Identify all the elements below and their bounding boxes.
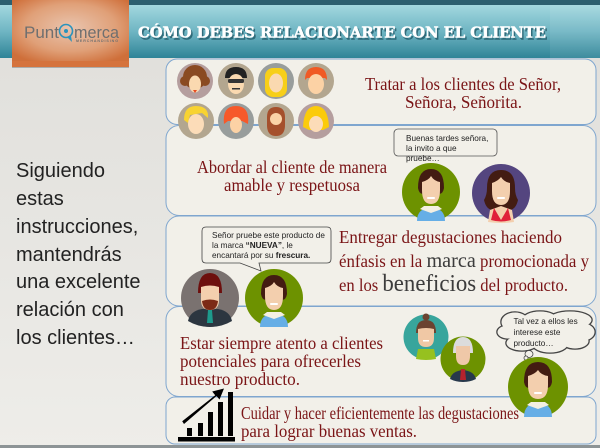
avatar grid: clients: [177, 63, 334, 139]
text: tratar: [365, 74, 561, 112]
text: estar atento: potenciales para ofrecerles: [180, 351, 361, 371]
logo: Punt: [24, 23, 59, 42]
text: entregar degustaciones: énfasis en la marca promocionada y: [339, 248, 589, 272]
text: estar atento: [180, 333, 383, 389]
left text block: los clientes…: [16, 327, 135, 349]
text: abordar: [197, 157, 387, 195]
thought bubble: producto…: [514, 339, 554, 348]
speech bubble: greeting: pruebe…: [406, 154, 440, 163]
left text block: mantendrás: [16, 244, 122, 266]
title: CÓMO DEBES RELACIONARTE CON EL CLIENTE: [138, 24, 546, 42]
avatar: old man: [440, 336, 486, 382]
text: tratar: Tratar a los clientes de Señor,: [365, 74, 561, 94]
panel 4: [166, 306, 596, 396]
header band: [0, 0, 600, 58]
speech bubble: greeting: [394, 129, 497, 163]
left text block: instrucciones,: [16, 216, 138, 238]
text: entregar degustaciones: en los beneficios del producto.: [339, 271, 568, 297]
logo: MERCHANDISING: [76, 39, 118, 43]
speech bubble: greeting: la invito a que: [406, 144, 457, 153]
left text block: una excelente: [16, 271, 141, 293]
logo: merca: [74, 23, 120, 42]
text: cuidar: para lograr buenas ventas.: [241, 421, 417, 441]
speech bubble: product offer: la marca “NUEVA”, le: [212, 241, 293, 250]
text: abordar: amable y respetuosa: [224, 175, 360, 195]
thought bubble: interese este: [514, 328, 561, 337]
avatar: woman green offering: [245, 269, 303, 327]
speech bubble: product offer: Señor pruebe este producto de: [212, 231, 325, 240]
text: abordar: Abordar al cliente de manera: [197, 157, 387, 177]
thought bubble: Tal vez a ellos les: [514, 317, 578, 326]
left text block: Siguiendo: [16, 160, 105, 182]
text: tratar: Señora, Señorita.: [405, 92, 522, 112]
speech bubble: greeting: Buenas tardes señora,: [406, 134, 488, 143]
text: cuidar: [241, 403, 519, 441]
panel 2: [166, 126, 596, 216]
text: entregar degustaciones: Entregar degustaciones haciendo: [339, 227, 562, 247]
icon: growth chart: [178, 388, 235, 442]
thought bubble: [497, 311, 595, 360]
speech bubble: product offer: encantará por su frescura.: [212, 251, 310, 260]
panel 3: [166, 216, 596, 306]
left text block: relación con: [16, 299, 124, 321]
speech bubble: product offer: [202, 227, 331, 271]
panel 5: [166, 397, 596, 444]
avatar: woman green: [402, 163, 460, 221]
left text block: estas: [16, 188, 64, 210]
avatar: woman purple: [472, 164, 530, 223]
left text block: [16, 160, 141, 349]
logo: [12, 0, 129, 68]
text: estar atento: Estar siempre atento a clientes: [180, 333, 383, 353]
title: CÓMO DEBES RELACIONARTE CON EL CLIENTE: [140, 26, 548, 44]
avatar: woman teal: [404, 314, 448, 360]
text: cuidar: Cuidar y hacer eficientemente las degustaciones: [241, 403, 519, 423]
avatar: man gray: [181, 269, 239, 327]
text: estar atento: nuestro producto.: [180, 369, 300, 389]
text: entregar degustaciones: [339, 227, 589, 297]
panel 1: [166, 59, 596, 124]
avatar: woman thinking: [508, 357, 568, 417]
